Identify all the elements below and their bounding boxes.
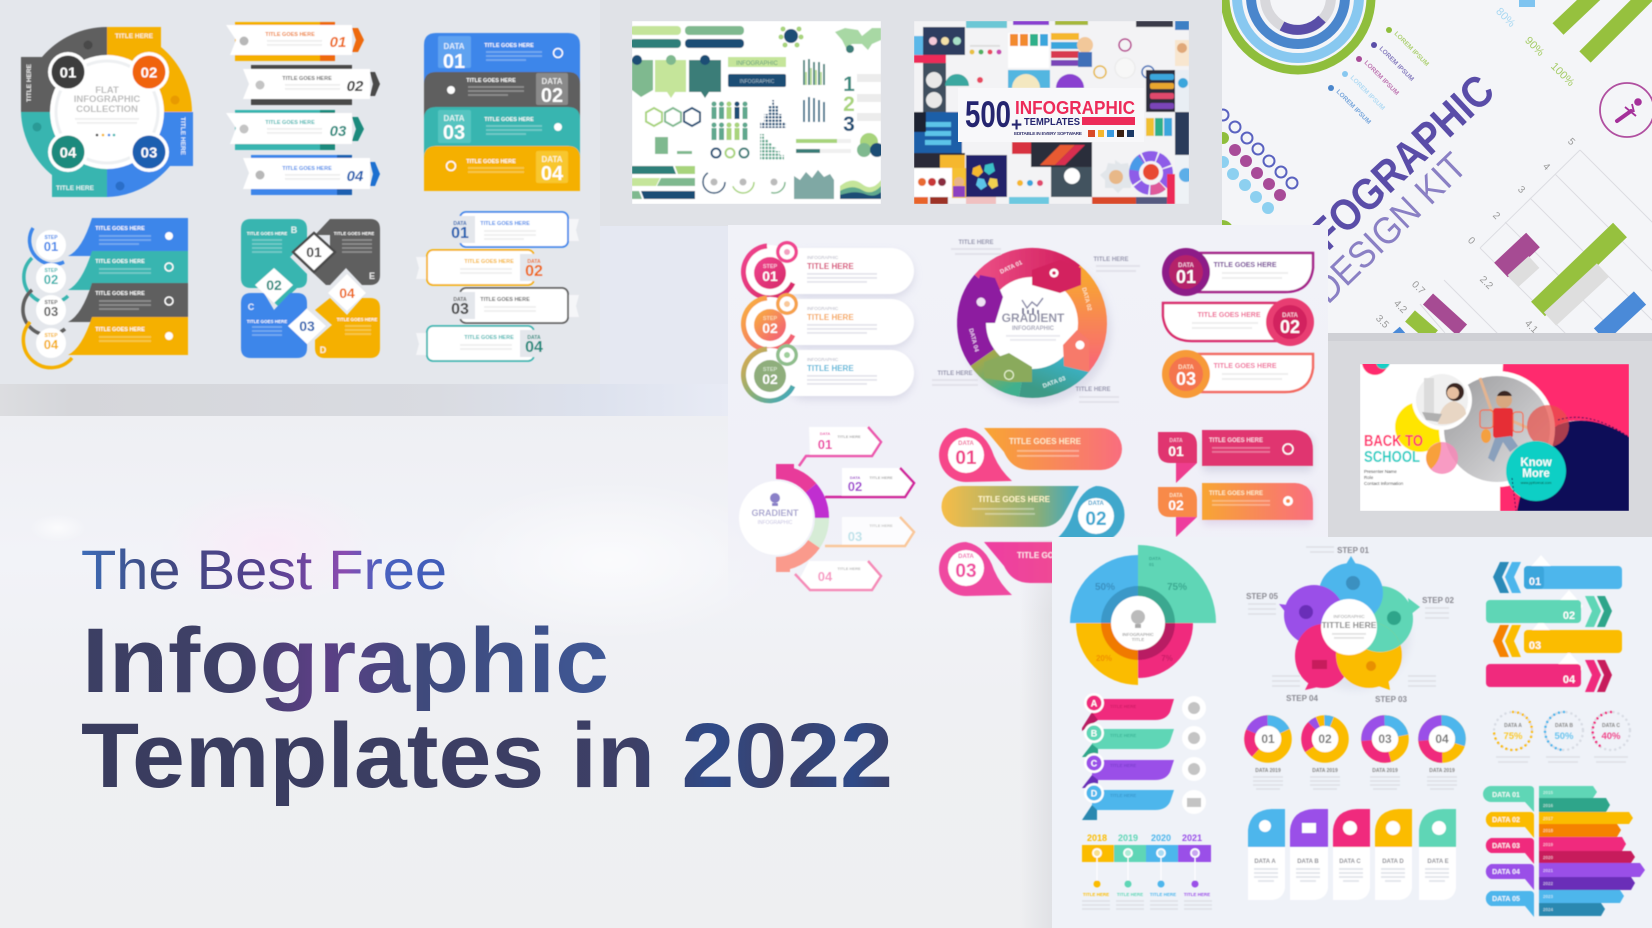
preview: green infographic kit: 2 <box>843 93 855 116</box>
step stack: STEP <box>44 235 58 241</box>
step stack: 02 <box>44 272 58 287</box>
arrow banners: TITLE GOES HERE <box>282 166 332 172</box>
white title card: 500 <box>965 94 1011 135</box>
gradient hub with hex labels: DATA <box>850 475 860 480</box>
data labels 01-03: DATA <box>1282 313 1299 319</box>
outlined data labels: 03 <box>451 301 469 318</box>
chevron labels: 04 <box>1563 674 1576 686</box>
bar charts: 2.2 <box>1477 274 1495 292</box>
diamond puzzle: TITLE GOES HERE <box>247 319 287 324</box>
dotted percent gauges: DATA B <box>1555 723 1573 729</box>
step stack <box>23 218 188 368</box>
stacked data cards: DATA <box>443 42 465 51</box>
step 03: INFOGRAPHIC <box>807 357 839 362</box>
step 01 <box>742 241 877 301</box>
outlined data labels: DATA <box>453 297 467 303</box>
flag bands <box>1158 430 1313 537</box>
quadrant pie chart: 01 <box>1149 562 1155 567</box>
radial ring chart <box>1225 0 1371 70</box>
flag bands: DATA <box>1169 493 1183 499</box>
stacked data cards: DATA <box>541 155 563 164</box>
jumping kid <box>1480 378 1528 462</box>
stacked data cards <box>424 33 580 191</box>
arrow banners: 01 <box>330 34 346 51</box>
step 02: 02 <box>762 320 778 336</box>
step 03: TITLE HERE <box>807 364 854 373</box>
preview: green infographic kit: INFOGRAPHIC <box>736 61 778 67</box>
slide text: SCHOOL <box>1364 449 1420 466</box>
step flower diagram: STEP 05 <box>1246 592 1278 601</box>
flat circular collection: 02 <box>141 64 157 82</box>
letter ribbons A-D: TITLE HERE <box>1110 704 1136 709</box>
diamond puzzle: TITLE GOES HERE <box>247 231 287 236</box>
preview: green infographic kit <box>630 21 884 204</box>
diamond puzzle: D <box>320 345 327 355</box>
flat circular collection: TITLE HERE <box>179 117 186 156</box>
data speech labels: DATA 01 <box>1492 792 1520 799</box>
stacked data cards: DATA <box>443 114 465 123</box>
icon: person in circle <box>1600 83 1652 137</box>
stacked data cards: TITLE GOES HERE <box>484 43 534 49</box>
arrow banners: 04 <box>347 168 364 185</box>
data labels 01-03 <box>1162 248 1314 398</box>
outlined data labels: TITLE GOES HERE <box>464 335 514 341</box>
data labels 01-03: TITLE GOES HERE <box>1213 262 1277 269</box>
year timeline: 2019 <box>1118 833 1138 843</box>
step 01: STEP <box>763 264 778 270</box>
step stack: TITLE GOES HERE <box>95 226 145 232</box>
quadrant pie chart: 20% <box>1096 654 1112 663</box>
gradient ribbons: DATA <box>1088 501 1105 507</box>
dotted percent gauges: DATA A <box>1504 723 1522 729</box>
gradient ribbons: TITLE GOES HERE <box>1017 551 1090 560</box>
heading line: Templates in 2022: Templates in 2022 <box>81 705 893 807</box>
quadrant pie chart: 75% <box>1167 582 1187 593</box>
bar charts: 4.1 <box>1522 318 1540 336</box>
step 01: 01 <box>762 268 778 284</box>
outlined data labels: DATA <box>527 259 541 265</box>
gradient ribbons: 01 <box>955 448 977 469</box>
year timeline <box>1082 833 1212 909</box>
stacked arrow bars: 2015 <box>1543 790 1554 795</box>
gradient hub with hex labels: GRADIENT <box>752 508 799 518</box>
data cards A-E: DATA A <box>1254 859 1276 865</box>
dotted percent gauges <box>1494 712 1630 762</box>
chevron labels: 02 <box>1563 610 1575 622</box>
school slide <box>1360 349 1629 511</box>
stacked arrow bars: 2021 <box>1543 868 1554 873</box>
preview: green infographic kit: 3 <box>843 113 855 136</box>
gradient hub with hex labels: 04 <box>818 569 833 584</box>
arrow banners: 03 <box>330 123 347 140</box>
top green bars <box>1519 0 1650 57</box>
gradient ribbons <box>939 428 1124 596</box>
step flower diagram: STEP 04 <box>1286 694 1318 703</box>
step 01: INFOGRAPHIC <box>807 255 839 260</box>
arrow banners: TITLE GOES HERE <box>265 32 315 38</box>
step stack: TITLE GOES HERE <box>95 259 145 265</box>
slide text <box>1364 433 1552 486</box>
step flower diagram: STEP 01 <box>1337 546 1369 555</box>
data labels 01-03: DATA <box>1178 365 1195 371</box>
preview: 500+ infographic templates collage <box>914 21 1193 204</box>
stacked arrow bars: 2018 <box>1543 828 1554 833</box>
bar charts: 0 <box>1465 235 1477 247</box>
gradient ring chart: DATA 04 <box>967 328 979 353</box>
data labels 01-03: TITLE GOES HERE <box>1213 363 1277 370</box>
percent labels: 80% <box>1493 6 1517 30</box>
legend list <box>1328 27 1430 126</box>
letter ribbons A-D: B <box>1091 728 1098 738</box>
flag bands: DATA <box>1169 438 1183 444</box>
preview: green infographic kit: INFOGRAPHIC <box>740 79 775 85</box>
white title card: + <box>1011 115 1022 136</box>
data labels 01-03: 01 <box>1176 267 1196 287</box>
diamond puzzle: B <box>291 225 298 235</box>
diamond puzzle: 01 <box>306 244 322 260</box>
gradient ring chart: TITLE HERE <box>937 371 973 377</box>
dotted percent gauges: DATA C <box>1602 723 1620 729</box>
gradient hub with hex labels: 02 <box>848 479 862 494</box>
gradient ring chart: GRADIENT <box>1002 311 1065 325</box>
data speech labels: DATA 04 <box>1492 869 1520 876</box>
quadrant pie chart: 7% <box>1161 654 1173 663</box>
step stack: 03 <box>44 304 58 319</box>
flat circular collection: 04 <box>60 144 77 162</box>
outlined data labels: TITLE GOES HERE <box>480 221 530 227</box>
bar charts: 5 <box>1565 136 1577 148</box>
donut charts <box>1250 720 1460 758</box>
outlined data labels: TITLE GOES HERE <box>464 259 514 265</box>
step 03: STEP <box>763 367 778 373</box>
gradient ribbons: TITLE GOES HERE <box>1009 437 1082 446</box>
letter ribbons A-D <box>1082 693 1206 820</box>
donut labels: DATA 2019 <box>1255 768 1281 774</box>
data cards A-E: DATA D <box>1382 859 1404 865</box>
quadrant pie chart <box>1070 545 1216 685</box>
step flower diagram: TITTLE HERE <box>1322 620 1377 630</box>
gradient hub with hex labels: 03 <box>848 529 862 544</box>
chevron labels: 01 <box>1529 576 1541 588</box>
quadrant pie chart: INFOGRAPHIC <box>1122 632 1155 637</box>
flat circular collection: COLLECTION <box>76 104 138 115</box>
percent labels: 90% <box>1522 35 1546 59</box>
letter ribbons A-D: TITLE HERE <box>1110 733 1136 738</box>
legend list: LOREM IPSUM <box>1349 74 1386 112</box>
stacked data cards: 03 <box>443 122 465 144</box>
step stack: STEP <box>44 333 58 339</box>
year timeline: TITLE HERE <box>1184 892 1210 897</box>
legend list: LOREM IPSUM <box>1393 30 1430 68</box>
panel: flat colour infographics <box>1052 537 1652 928</box>
legend list: LOREM IPSUM <box>1335 88 1372 126</box>
step flower diagram <box>1246 546 1454 704</box>
legend list: LOREM IPSUM <box>1363 59 1400 97</box>
letter ribbons A-D: C <box>1091 758 1098 768</box>
flat circular collection: 01 <box>60 64 76 82</box>
gradient ribbons: DATA <box>958 554 975 560</box>
gradient ring chart: DATA 02 <box>1080 287 1092 312</box>
slide text: Presenter Name <box>1364 469 1397 474</box>
dotted percent gauges: 50% <box>1554 731 1574 742</box>
bar charts <box>1376 138 1652 333</box>
outlined data labels: DATA <box>453 221 467 227</box>
diamond puzzle: TITLE GOES HERE <box>337 317 377 322</box>
data labels 01-03: DATA <box>1178 263 1195 269</box>
donut labels <box>1253 726 1457 789</box>
flat circular collection: INFOGRAPHIC <box>74 94 140 105</box>
step stack: STEP <box>44 300 58 306</box>
letter ribbons A-D: D <box>1091 788 1098 798</box>
donut labels: 03 <box>1378 732 1392 746</box>
flat circular collection: TITLE HERE <box>56 185 95 192</box>
gradient ring chart: TITLE HERE <box>1093 257 1129 263</box>
diamond puzzle: 04 <box>339 285 355 301</box>
donut labels: 01 <box>1261 732 1275 746</box>
stacked arrow bars: 2016 <box>1543 803 1554 808</box>
panel: top middle template previews <box>600 0 1225 226</box>
stacked arrow bars: 2022 <box>1543 881 1554 886</box>
outlined data labels: DATA <box>527 335 541 341</box>
panel: flat infographic collection <box>0 0 600 384</box>
gradient ring chart: TITLE HERE <box>1075 387 1111 393</box>
white title card: INFOGRAPHIC <box>1015 98 1135 118</box>
white title card: TEMPLATES <box>1024 116 1080 128</box>
step 03: 02 <box>762 371 778 387</box>
white title card <box>958 88 1144 142</box>
diamond puzzle: C <box>248 302 255 312</box>
outlined data labels: 01 <box>451 225 469 242</box>
year timeline: TITLE HERE <box>1117 892 1143 897</box>
bar charts: 3.5 <box>1373 313 1391 331</box>
arrow banners: TITLE GOES HERE <box>282 76 332 82</box>
stacked arrow bars: 2019 <box>1543 842 1554 847</box>
outlined data labels: 02 <box>525 263 543 280</box>
gradient hub with hex labels: DATA <box>820 431 830 436</box>
percent labels <box>1496 8 1574 86</box>
bar charts: 0.7 <box>1409 279 1427 297</box>
quadrant pie chart: DATA <box>1149 556 1162 561</box>
stacked data cards: DATA <box>541 77 563 86</box>
bar charts: 3 <box>1515 184 1527 196</box>
bar charts: 4 <box>1540 161 1552 173</box>
bar charts: 2 <box>1490 210 1502 222</box>
step 03 <box>742 344 877 404</box>
flag bands: TITLE GOES HERE <box>1209 491 1263 497</box>
outlined data labels: TITLE GOES HERE <box>480 297 530 303</box>
slide text: www.pptformat.com <box>1521 481 1551 485</box>
data speech labels: DATA 02 <box>1492 817 1520 824</box>
stacked arrow bars: 2023 <box>1543 894 1554 899</box>
donut labels: 04 <box>1435 732 1449 746</box>
rotated kit title <box>1312 76 1492 303</box>
diamond puzzle: TITLE GOES HERE <box>334 231 374 236</box>
flat circular collection: FLAT <box>95 85 119 96</box>
quadrant pie chart: TITLE <box>1132 637 1144 642</box>
gradient hub with hex labels: TITLE HERE <box>837 434 861 439</box>
step 01: TITLE HERE <box>807 262 854 271</box>
arrow banners <box>226 22 380 195</box>
bar charts: 4.2 <box>1391 298 1409 316</box>
gradient ring chart: DATA 01 <box>999 260 1024 276</box>
slide text: More <box>1522 468 1550 480</box>
data speech labels <box>1483 786 1534 917</box>
year timeline: 2020 <box>1151 833 1171 843</box>
heading line: Infographic: Infographic <box>82 610 609 712</box>
gradient ring chart: INFOGRAPHIC <box>1012 326 1055 332</box>
diamond puzzle: 03 <box>299 318 315 334</box>
flag bands: 01 <box>1168 443 1184 459</box>
panel: gradient infographics <box>728 225 1328 615</box>
dot matrix <box>1222 108 1298 225</box>
step stack: 04 <box>44 337 59 352</box>
background light glow <box>0 226 1052 928</box>
diamond puzzle: E <box>369 271 375 281</box>
data cards A-E: DATA E <box>1427 859 1449 865</box>
flat circular collection: TITLE HERE <box>26 63 33 102</box>
gradient hub with hex labels: TITLE HERE <box>869 475 893 480</box>
slide text: BACK TO <box>1364 433 1423 450</box>
gradient hub with hex labels: 01 <box>818 437 832 452</box>
data speech labels: DATA 05 <box>1492 896 1520 903</box>
gradient ribbons: 02 <box>1085 509 1107 530</box>
year timeline: 2018 <box>1087 833 1107 843</box>
step stack: TITLE GOES HERE <box>95 327 145 333</box>
year timeline: TITLE HERE <box>1150 892 1176 897</box>
donut labels: 02 <box>1318 732 1332 746</box>
percent labels: 100% <box>1548 61 1577 89</box>
subtitle: The Best Free: The Best Free <box>81 538 447 601</box>
step 02: STEP <box>763 316 778 322</box>
dotted percent gauges: 40% <box>1601 731 1621 742</box>
step 02 <box>742 293 877 353</box>
letter ribbons A-D: TITLE HERE <box>1110 793 1136 798</box>
data labels 01-03: 03 <box>1176 369 1196 389</box>
stacked arrow bars <box>1539 786 1645 916</box>
year timeline: TITLE HERE <box>1083 892 1109 897</box>
stacked data cards: 01 <box>443 51 465 73</box>
donut labels: DATA 2019 <box>1312 768 1338 774</box>
dotted percent gauges: 75% <box>1503 731 1523 742</box>
step 02: INFOGRAPHIC <box>807 306 839 311</box>
gradient hub with hex labels: TITLE HERE <box>837 566 861 571</box>
year timeline: 2021 <box>1182 833 1202 843</box>
step flower diagram: INFOGRAPHIC <box>1333 614 1365 619</box>
panel: back to school <box>1328 333 1652 540</box>
legend list: LOREM IPSUM <box>1378 45 1415 83</box>
step pills <box>742 241 914 404</box>
woman photo <box>1412 370 1472 430</box>
arrow banners: 02 <box>347 78 364 95</box>
gradient hub with hex labels: INFOGRAPHIC <box>758 520 793 526</box>
step 02: TITLE HERE <box>807 313 854 322</box>
white title card: EDITABLE IN EVERY SOFTWARE <box>1014 131 1083 137</box>
letter ribbons A-D: TITLE HERE <box>1110 763 1136 768</box>
rotated kit title: DESIGN KIT <box>1305 145 1475 312</box>
gradient ring chart: DATA 03 <box>1042 376 1067 390</box>
slide text: Contact Information <box>1364 481 1404 486</box>
panel: infographic design kit <box>1210 0 1652 358</box>
stacked arrow bars: 2020 <box>1543 855 1554 860</box>
outlined data labels <box>416 212 579 361</box>
flat circular collection: TITLE HERE <box>115 33 154 40</box>
title <box>81 538 893 807</box>
stacked arrow bars: 2024 <box>1543 907 1554 912</box>
flag bands: 02 <box>1168 497 1184 513</box>
step stack: TITLE GOES HERE <box>95 291 145 297</box>
chevron labels: 03 <box>1529 640 1541 652</box>
outlined data labels: 04 <box>525 339 543 356</box>
flag bands: TITLE GOES HERE <box>1209 438 1263 444</box>
data labels 01-03: 02 <box>1280 317 1300 337</box>
step stack: STEP <box>44 268 58 274</box>
stacked data cards: 04 <box>541 163 564 185</box>
quadrant pie chart: 50% <box>1095 582 1115 593</box>
data cards A-E <box>1248 809 1456 900</box>
slide text: Know <box>1520 457 1552 469</box>
letter ribbons A-D: A <box>1091 698 1098 708</box>
gradient ring chart: TITLE HERE <box>958 240 994 246</box>
gradient ribbons: DATA <box>958 441 975 447</box>
gradient hub with hex labels <box>739 427 914 590</box>
gradient ring chart <box>932 240 1140 404</box>
data cards A-E: DATA B <box>1297 859 1319 865</box>
flat circular collection: 03 <box>141 144 157 162</box>
preview: green infographic kit: 1 <box>843 73 855 96</box>
rotated kit title: INFOGRAPHIC <box>1273 65 1504 285</box>
diamond puzzle <box>241 219 380 358</box>
data cards A-E: DATA C <box>1339 859 1361 865</box>
gradient ribbons: TITLE GOES HERE <box>978 495 1051 504</box>
data labels 01-03: TITLE GOES HERE <box>1197 312 1261 319</box>
step flower diagram: STEP 02 <box>1422 596 1454 605</box>
data speech labels: DATA 03 <box>1492 843 1520 850</box>
arrow banners: TITLE GOES HERE <box>265 120 315 126</box>
step stack: 01 <box>44 239 58 254</box>
step flower diagram: STEP 03 <box>1375 695 1407 704</box>
diamond puzzle: 02 <box>266 277 282 293</box>
stacked data cards: TITLE GOES HERE <box>484 117 534 123</box>
gradient hub with hex labels: TITLE HERE <box>869 523 893 528</box>
donut labels: DATA 2019 <box>1429 768 1455 774</box>
slide text: Role <box>1364 475 1374 480</box>
stacked data cards: TITLE GOES HERE <box>466 159 516 165</box>
stacked arrow bars: 2017 <box>1543 816 1554 821</box>
stacked data cards: 02 <box>541 85 563 107</box>
gradient ribbons: 03 <box>955 561 977 582</box>
chevron labels <box>1486 555 1622 692</box>
donut labels: DATA 2019 <box>1372 768 1398 774</box>
stacked data cards: TITLE GOES HERE <box>466 78 516 84</box>
flat circular collection <box>21 27 193 197</box>
